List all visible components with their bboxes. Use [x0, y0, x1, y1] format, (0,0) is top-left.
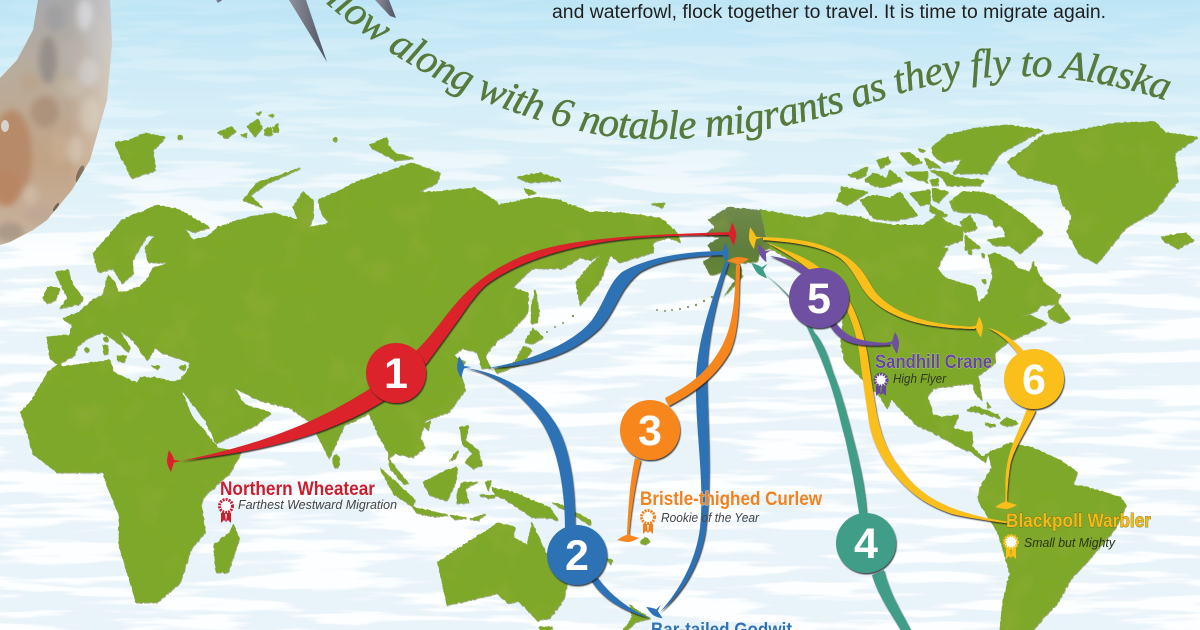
landmass: Newfoundland — [1048, 303, 1070, 323]
numbered badge 4 — [836, 513, 896, 573]
numbered badge 6: 6 — [1022, 356, 1046, 404]
label: Sandhill Crane: High Flyer — [893, 371, 947, 386]
migrating bird icons — [167, 222, 1017, 621]
icon: red rosette — [220, 500, 232, 523]
landmass: Greenland — [1007, 122, 1197, 263]
route 2: blue, Bar-tailed Godwit — [465, 251, 729, 618]
landmass: Australia — [438, 523, 567, 620]
icon: orange bird, Alaska — [727, 257, 749, 271]
label: Bristle-thighed Curlew: Rookie of the Year — [661, 510, 760, 525]
landmass: Eurasia — [47, 163, 680, 483]
numbered badge 1 — [366, 343, 426, 403]
landmass: Iceland — [1161, 233, 1193, 248]
numbered badge 6 — [1004, 349, 1064, 409]
icon: yellow rosette — [1004, 536, 1018, 559]
intro text: and waterfowl, flock together to travel. It is time to migrate again. — [552, 2, 1106, 23]
numbered badge 2 — [547, 525, 607, 585]
bird: bill and legs — [216, 0, 396, 62]
label: Northern Wheatear — [220, 479, 397, 523]
route 3: orange, Bristle-thighed Curlew — [627, 265, 740, 535]
landmass: North America — [760, 210, 1060, 462]
numbered badge 3: 3 — [638, 407, 662, 455]
landmass: British Isles and Mediterranean islands — [43, 270, 186, 370]
landmass: Japan, Sakhalin, Taiwan — [423, 290, 543, 430]
label: Sandhill Crane — [875, 352, 992, 396]
label: Blackpoll Warbler: Small but Mighty — [1024, 535, 1116, 550]
label: Bristle-thighed Curlew: Bristle-thighed Curlew — [640, 489, 822, 510]
landmass: Madagascar and Sri Lanka — [214, 455, 339, 572]
icon: yellow bird, eastern North America — [970, 317, 983, 337]
landmass: Caribbean islands — [967, 402, 1018, 427]
numbered badge 5: 5 — [807, 275, 831, 323]
landmass: New Zealand and Tasmania — [539, 558, 650, 630]
landmass: Arctic Russia islands — [115, 112, 665, 207]
Aleutian and Kuril island chains — [546, 296, 713, 333]
icon: purple bird, Great Plains — [885, 332, 899, 354]
label: Bristle-thighed Curlew — [640, 489, 822, 534]
numbered badge 2: 2 — [565, 532, 589, 580]
icon: purple rosette — [875, 374, 887, 396]
icon: yellow bird, South America — [995, 495, 1017, 509]
numbered badge 1: 1 — [384, 350, 408, 398]
landmass: South America — [978, 443, 1126, 630]
landmass: Southeast Asia islands — [380, 426, 650, 544]
landmass: Africa — [21, 360, 241, 602]
landmass: Canadian Arctic islands — [837, 125, 1043, 282]
landmass: Alaska — [703, 207, 770, 297]
label: Sandhill Crane: Sandhill Crane — [875, 352, 992, 373]
icon: purple bird, Alaska — [756, 241, 775, 264]
icon: orange rosette — [642, 510, 654, 534]
icon: red bird, Africa — [167, 450, 181, 472]
route 1: red, Northern Wheatear — [180, 232, 735, 461]
label: Blackpoll Warbler: Blackpoll Warbler — [1006, 511, 1152, 532]
bird: body at upper left — [0, 0, 115, 250]
route 5: purple, Sandhill Crane — [770, 256, 890, 346]
route 6: yellow, Blackpoll Warbler — [763, 237, 1036, 523]
icon: blue bird, New Zealand — [645, 599, 668, 621]
label: Northern Wheatear: Farthest Westward Migration — [238, 497, 397, 512]
numbered badge 4: 4 — [854, 520, 878, 568]
numbered badge 3 — [620, 400, 680, 460]
label: Northern Wheatear: Northern Wheatear — [220, 479, 376, 500]
icon: red bird, Alaska — [722, 222, 736, 246]
icon: orange bird, Pacific island — [617, 528, 639, 542]
label: Blackpoll Warbler — [1004, 511, 1152, 559]
route 4: teal, Arctic Tern — [762, 272, 912, 630]
numbered badge 5 — [789, 268, 849, 328]
icon: teal bird, Alaska — [750, 255, 775, 281]
icon: yellow bird, Alaska — [748, 226, 764, 249]
icon: blue bird, Alaska — [716, 243, 729, 263]
icon: blue bird, Korea — [457, 356, 471, 378]
